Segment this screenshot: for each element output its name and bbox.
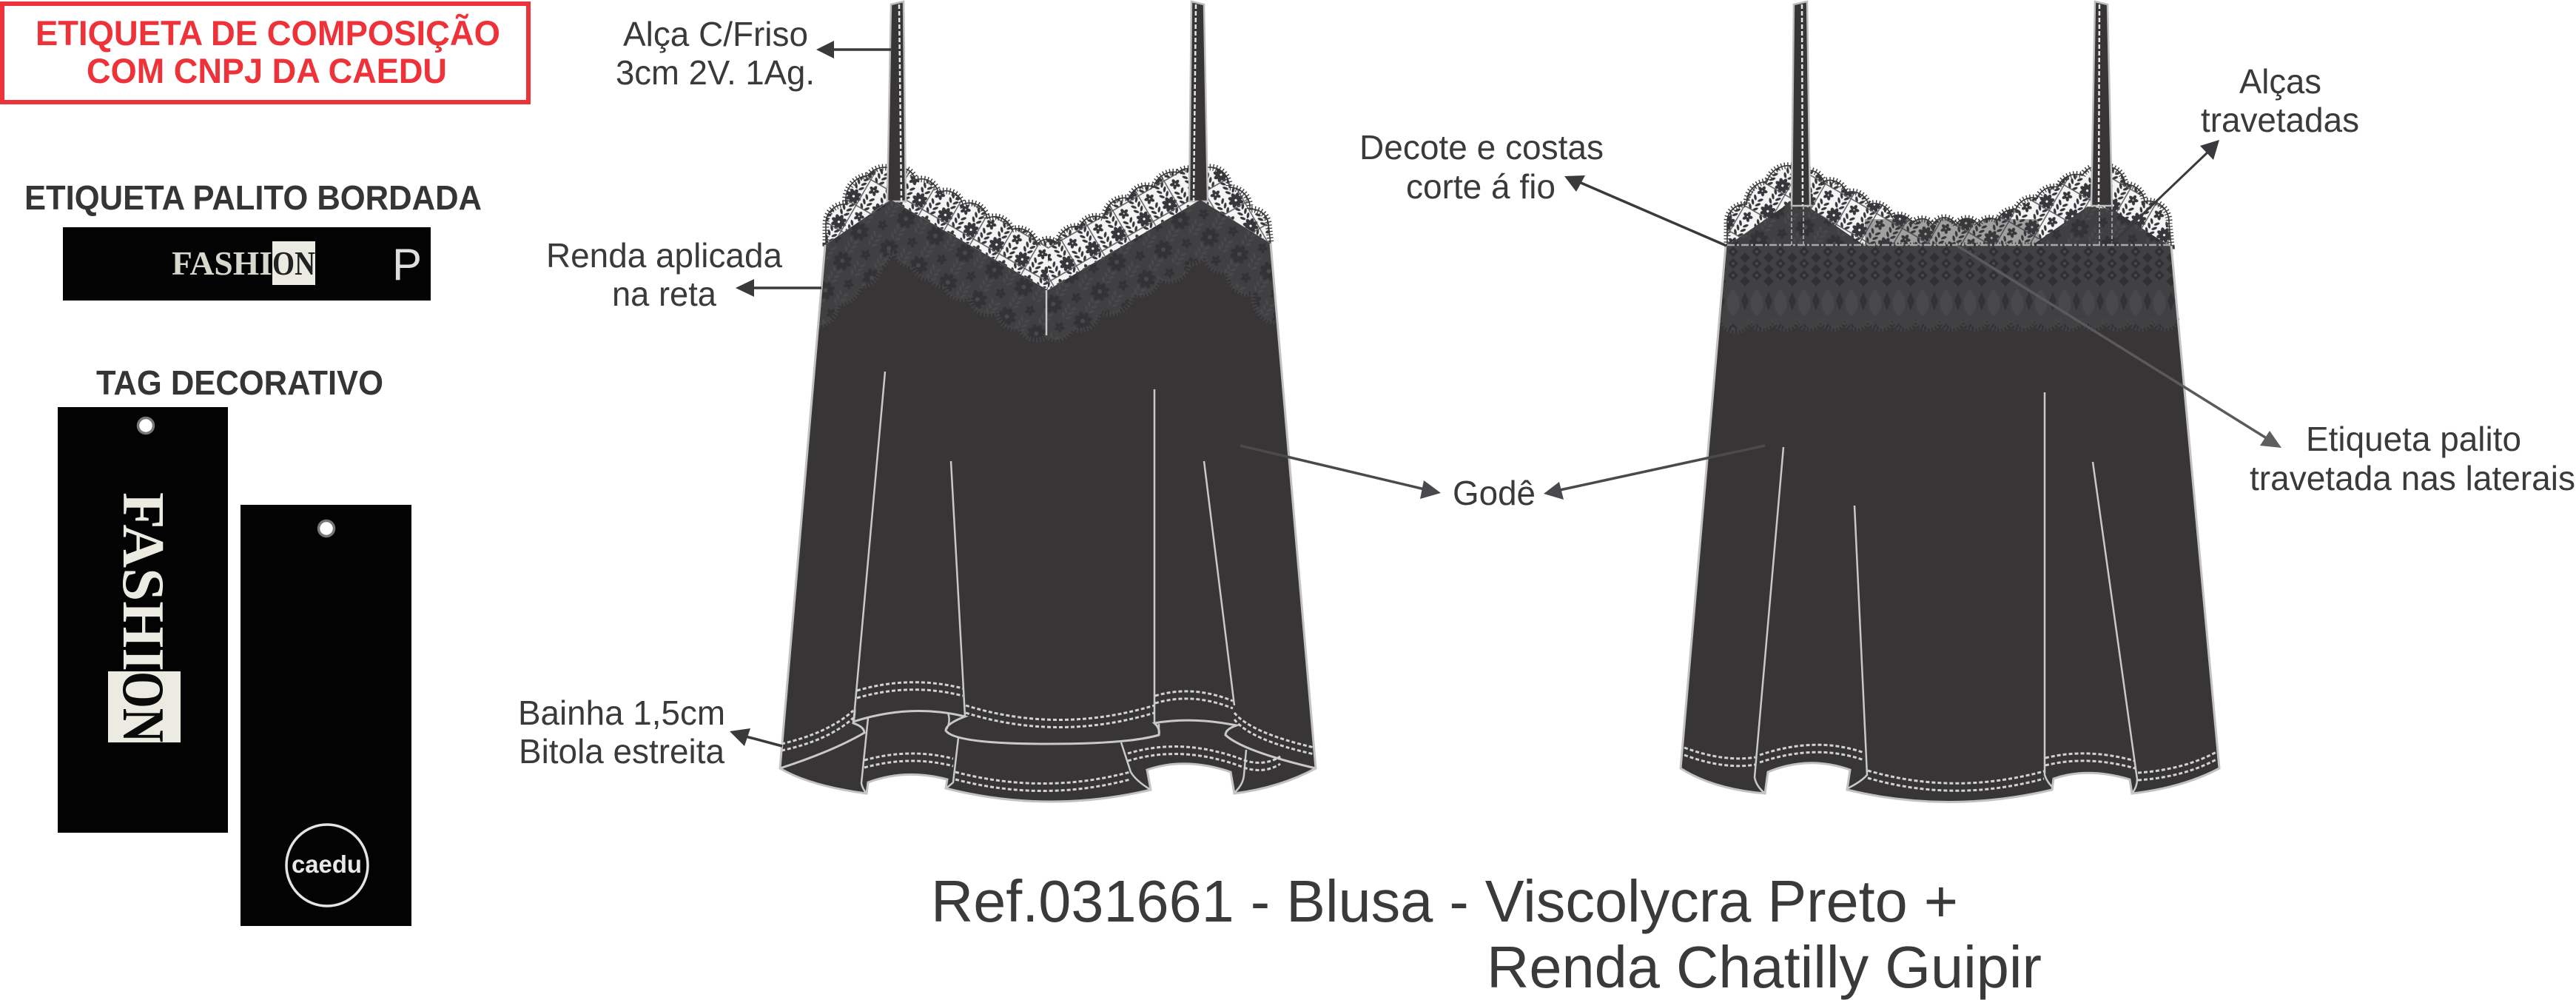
- strap: back left: [1792, 1, 1810, 245]
- arrow: bainha: [730, 728, 782, 746]
- panel: caedu hang tag: [241, 505, 411, 926]
- label: alça: Alça C/Friso: [623, 15, 808, 53]
- label: alça: 3cm 2V. 1Ag.: [616, 53, 815, 92]
- label: etiqueta palito: [2250, 420, 2575, 497]
- panel: embroidered stick label: ON: [272, 244, 315, 282]
- arrow: godê front: [1240, 446, 1441, 499]
- label: renda: Renda aplicada: [546, 236, 782, 275]
- arrow: decote: [1564, 175, 1726, 246]
- heading: tag decorativo: TAG DECORATIVO: [96, 363, 383, 402]
- strap: back right: [2091, 1, 2112, 245]
- label: alças travetadas: [2201, 62, 2359, 139]
- callout: composition label: [2, 4, 528, 102]
- panel: embroidered stick label: FASHI: [172, 244, 272, 282]
- callout: composition label: ETIQUETA DE COMPOSIÇÃO: [36, 13, 500, 53]
- panel: caedu hang tag: caedu: [292, 850, 362, 878]
- label: alça: [616, 15, 815, 92]
- callout: composition label: COM CNPJ DA CAEDU: [87, 51, 447, 90]
- title: product reference: Renda Chatilly Guipir: [1487, 934, 2042, 1000]
- hem stitching: front: [781, 682, 1314, 791]
- strap: front left: [887, 1, 906, 201]
- panel: fashion hang tag: ON: [110, 671, 175, 742]
- strap: front right: [1189, 1, 1208, 201]
- label: etiqueta palito: Etiqueta palito: [2306, 420, 2521, 458]
- label: bainha: Bainha 1,5cm: [518, 694, 725, 732]
- label: decote: Decote e costas: [1359, 128, 1604, 167]
- panel: embroidered stick label: P: [392, 240, 422, 289]
- label: renda: [546, 236, 782, 313]
- panel: embroidered stick label: [63, 227, 431, 301]
- title: product reference: [931, 868, 2042, 1000]
- seams: back: [1755, 392, 2137, 793]
- body: front: [780, 200, 1316, 802]
- outline: front silhouette: [780, 244, 1316, 802]
- outline: back silhouette: [1681, 246, 2219, 802]
- arrow: etiqueta palito: [1957, 246, 2281, 448]
- label: renda: na reta: [612, 275, 716, 313]
- garment: front view: [780, 1, 1316, 802]
- arrow: alças travetadas: [2112, 140, 2219, 244]
- body: back: [1681, 246, 2219, 802]
- label: etiqueta palito: travetada nas laterais: [2250, 459, 2575, 497]
- arrow: alça: [816, 41, 891, 58]
- title: product reference: Ref.031661 - Blusa - Viscolycra Preto +: [931, 868, 1958, 934]
- label: bainha: Bitola estreita: [519, 732, 724, 771]
- label: decote: [1359, 128, 1604, 206]
- panel: fashion hang tag: [58, 407, 228, 833]
- label: alças travetadas: travetadas: [2201, 101, 2359, 139]
- garment: back view: [1681, 1, 2219, 802]
- label: bainha: [518, 694, 725, 771]
- arrow: renda: [736, 279, 821, 297]
- label: alças travetadas: Alças: [2239, 62, 2321, 101]
- heading: etiqueta palito: ETIQUETA PALITO BORDADA: [24, 178, 482, 217]
- lace overlay: front body: [819, 200, 1276, 340]
- seams and folds: front: [780, 290, 1316, 793]
- label: godê: Godê: [1453, 474, 1536, 512]
- panel: fashion hang tag: FASHI: [110, 492, 175, 671]
- arrow: godê back: [1544, 446, 1765, 500]
- lace trim: front neckline: [825, 167, 1271, 293]
- lace band: back: [1721, 245, 2176, 331]
- label: decote: corte á fio: [1406, 167, 1556, 206]
- hem stitching: back: [1684, 745, 2216, 791]
- lace trim: back neckline: [1727, 166, 2171, 246]
